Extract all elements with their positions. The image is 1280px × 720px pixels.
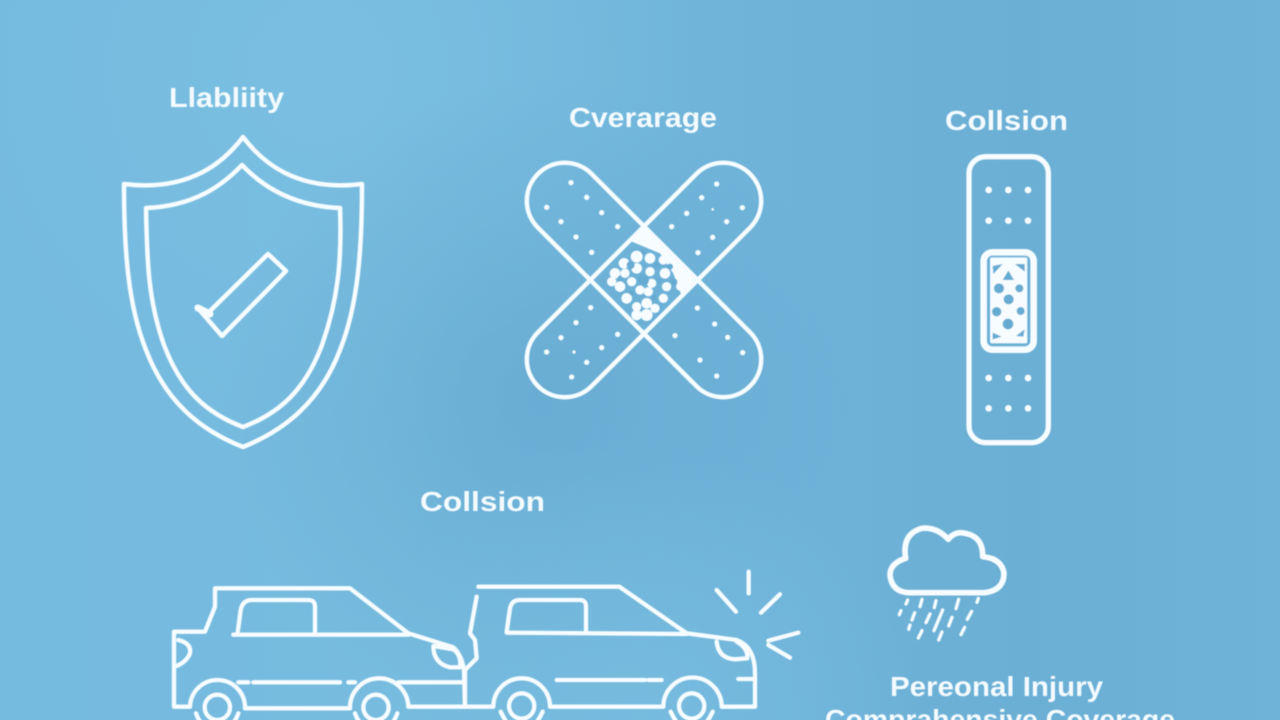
icon: crossed bandages — [511, 147, 777, 413]
heading: liability: Llabliity — [169, 82, 284, 113]
solid corner of the pad — [632, 227, 697, 296]
icon: rain cloud — [890, 528, 1004, 640]
icon: vertical bandage — [969, 157, 1048, 443]
panel: liability — [124, 82, 362, 447]
panel: personal injury and comprehensive — [825, 528, 1175, 720]
panel: coverage — [511, 102, 777, 413]
heading: collision: Collsion — [945, 105, 1068, 136]
heading: personal injury: Pereonal Injury — [890, 671, 1103, 702]
icon: rear car — [174, 588, 465, 720]
lattice of the pad — [607, 251, 684, 321]
heading: coverage: Cverarage — [569, 102, 717, 133]
panel: collision bandage — [945, 105, 1068, 443]
icon: shield with check — [124, 137, 362, 447]
icon: impact lines — [717, 572, 798, 658]
heading: collision cars: Collsion — [420, 486, 545, 517]
panel: collision cars — [174, 486, 798, 720]
icon: front car — [465, 572, 798, 720]
